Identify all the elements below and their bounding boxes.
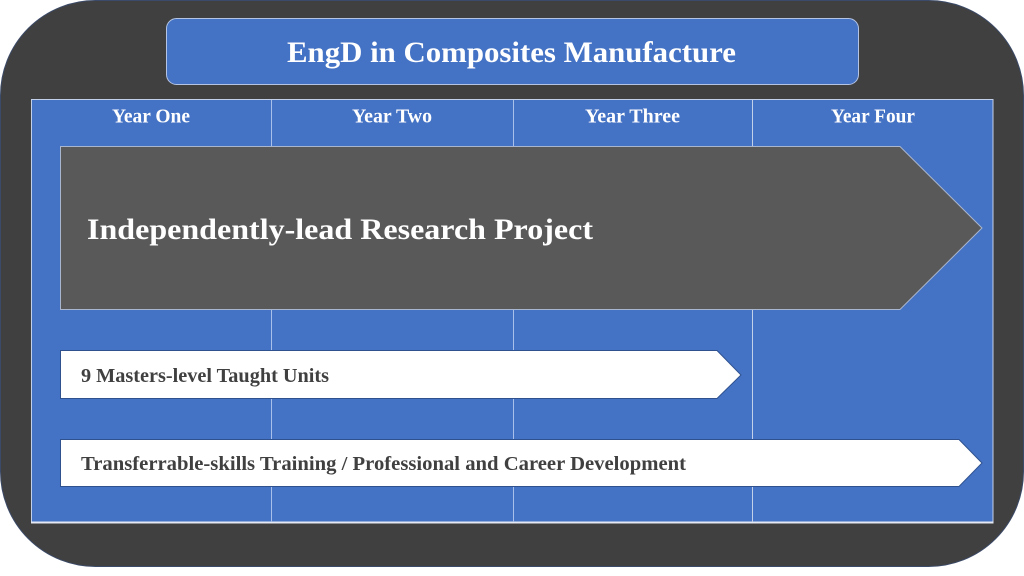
label: year two: Year Two	[352, 106, 432, 128]
label: year four: Year Four	[831, 106, 915, 128]
arrow: research project: Independently-lead Research Project	[87, 213, 593, 246]
arrow: transferrable-skills training: Transferrable-skills Training / Professional and Career Development	[81, 453, 686, 475]
label: year one: Year One	[112, 106, 190, 128]
arrow: transferrable-skills training	[60, 440, 982, 486]
title banner	[166, 18, 858, 84]
label: year three: Year Three	[585, 106, 680, 128]
panel: four-year timeline	[31, 100, 994, 522]
title banner: EngD in Composites Manufacture	[287, 36, 736, 69]
arrow: taught units: 9 Masters-level Taught Units	[81, 365, 329, 387]
arrow: research project	[60, 146, 982, 310]
arrow: taught units	[60, 350, 741, 398]
